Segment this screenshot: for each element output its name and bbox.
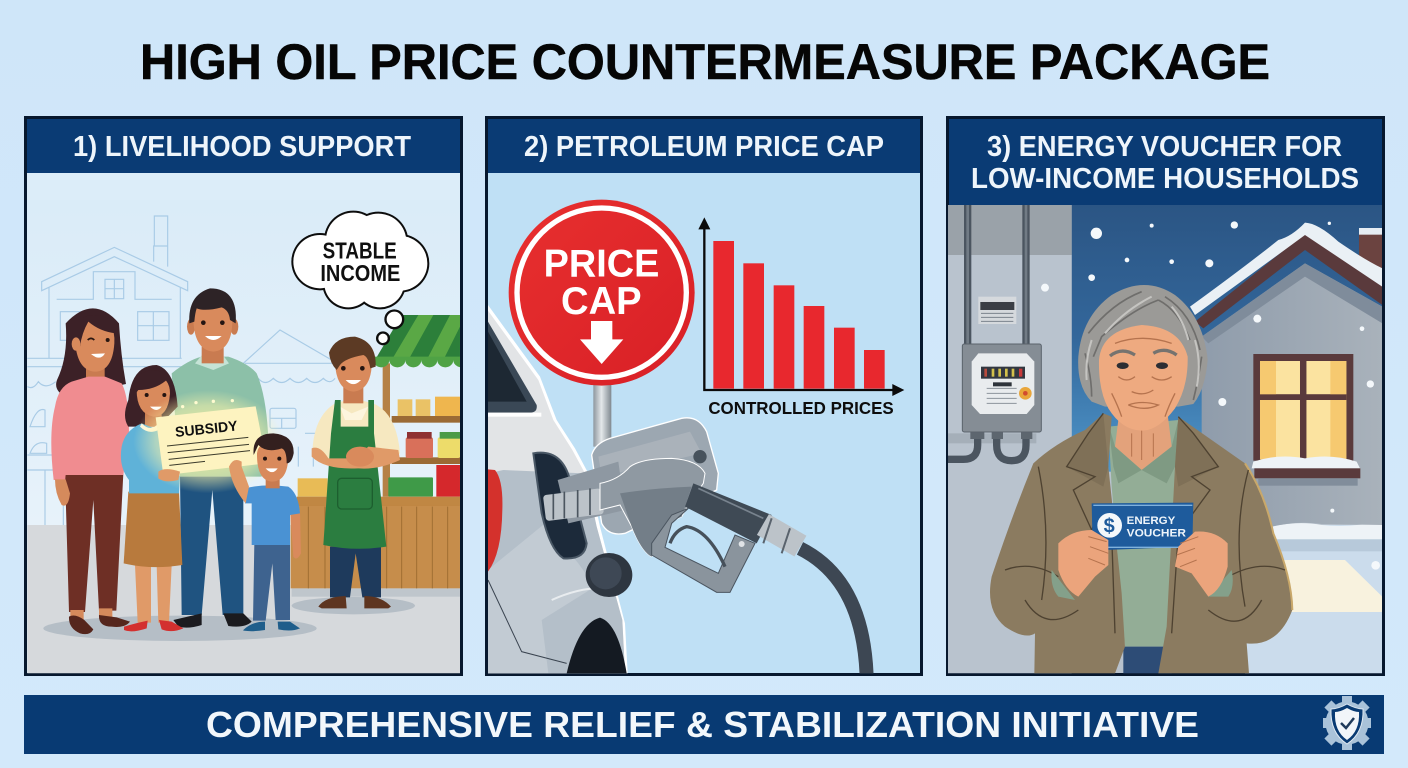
thought bubble: stable income: STABLE <box>323 237 397 263</box>
snowy ground <box>1245 521 1382 673</box>
line-art town background <box>27 216 335 525</box>
figure: girl <box>121 365 183 631</box>
hands <box>1058 530 1228 597</box>
vendor stall <box>291 315 469 588</box>
figure: mother <box>51 308 130 634</box>
panel 1 heading <box>27 119 460 173</box>
figure: vendor <box>312 337 400 608</box>
figure: father <box>172 288 268 628</box>
bar chart: controlled prices <box>698 217 904 418</box>
panel: petroleum price cap <box>486 118 922 677</box>
price cap sign: CAP <box>561 279 642 323</box>
subsidy certificate <box>133 390 283 493</box>
panel: energy voucher <box>948 118 1384 674</box>
panel 3 heading <box>949 119 1382 205</box>
woman's head and hair <box>1078 285 1208 431</box>
energy voucher card: $ <box>1104 516 1115 538</box>
falling snow <box>1041 221 1380 570</box>
market awning <box>375 315 460 360</box>
elderly woman <box>990 285 1292 673</box>
price cap sign: PRICE <box>544 242 659 286</box>
icon: shield and gear <box>1323 696 1371 750</box>
energy voucher card: VOUCHER <box>1127 528 1186 540</box>
energy voucher card <box>1092 503 1193 550</box>
illustration: family and vendor at market <box>27 173 469 673</box>
fuel cap <box>586 553 632 597</box>
thought bubble: stable income: INCOME <box>320 260 400 286</box>
panel 3 heading: 3) ENERGY VOUCHER FOR <box>987 131 1342 163</box>
panel 3 heading: LOW-INCOME HOUSEHOLDS <box>971 163 1359 195</box>
wall and utility meter <box>948 205 1072 673</box>
panel 2 heading <box>488 119 920 173</box>
fuel nozzle <box>543 458 806 592</box>
illustration: elderly woman with voucher in snow <box>948 205 1382 673</box>
bottom banner <box>24 695 1384 754</box>
ground shadows <box>43 616 317 641</box>
bottom banner: COMPREHENSIVE RELIEF & STABILIZATION INITIATIVE <box>206 704 1199 745</box>
fuel hose <box>800 548 867 677</box>
bar chart: controlled prices: CONTROLLED PRICES <box>708 398 894 418</box>
panel 1 heading: 1) LIVELIHOOD SUPPORT <box>73 131 411 163</box>
title: HIGH OIL PRICE COUNTERMEASURE PACKAGE <box>140 34 1270 90</box>
thought bubble: stable income <box>291 211 429 345</box>
energy voucher card: ENERGY <box>1127 515 1176 527</box>
night sky <box>1072 205 1382 472</box>
fuel door <box>592 418 718 534</box>
illustration: price cap sign, chart, fuel nozzle <box>488 200 904 677</box>
house with snowy roof and lit window <box>1190 223 1382 528</box>
figure: boy <box>229 433 301 631</box>
car body <box>488 305 628 673</box>
subsidy certificate: SUBSIDY <box>174 418 239 441</box>
price cap sign <box>509 200 695 386</box>
panel 2 heading: 2) PETROLEUM PRICE CAP <box>524 131 884 163</box>
sign pole <box>593 383 611 447</box>
panel: livelihood support <box>26 118 469 674</box>
